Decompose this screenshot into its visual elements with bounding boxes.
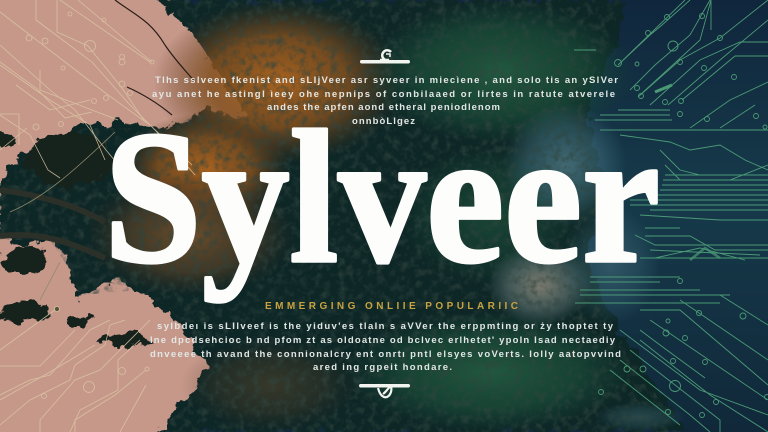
lower paragraph: [150, 321, 621, 373]
lower paragraph: dnveeee th avand the connionalcry ent onrtı pntl elsyes voVerts. Iolly aatopvvind: [150, 349, 621, 360]
lower paragraph: lne dpcdsehcioc b nd pfom zt as oldoatne od bclvec erlhetet' ypoln Isad nectaediy: [150, 335, 616, 346]
title: Sylveer: Sylveer: [104, 93, 660, 303]
intro paragraph: [152, 75, 618, 127]
intro paragraph: onnbòLlgez: [352, 116, 415, 127]
ornament: top leaf divider: [360, 50, 410, 64]
lower paragraph: ared ing rgpeit hondare.: [313, 362, 452, 373]
intro paragraph: Tlhs sslveen fkenist and sLIjVeer asr syveer in miecìene , and solo tis an ySlVer: [155, 75, 618, 86]
left trees and branches: [0, 0, 195, 345]
forest colour glows: [85, 0, 685, 432]
intro paragraph: andes the apfen aond etheral peniodlenom: [267, 102, 500, 113]
intro paragraph: ayu anet he astingl ìeey ohe nepnips of conbilaaed or lirtes in ratute atverele: [152, 89, 615, 100]
background: pink left side: [0, 0, 255, 432]
circuit traces: bottom right: [575, 236, 768, 432]
circuit traces: top left: [0, 0, 195, 185]
circuit traces: top right: [574, 0, 768, 258]
subheading: emerging online popularity: EMMERGING ONLIIE POPULARIIC: [265, 301, 518, 312]
lower paragraph: sylbdeı is sLIlveef is the yiduv'es tlaln s aVVer the erppmting or ży thoptet ty: [157, 321, 614, 332]
circuit traces: bottom left: [0, 306, 150, 432]
ornament: bottom leaf divider: [359, 384, 410, 397]
